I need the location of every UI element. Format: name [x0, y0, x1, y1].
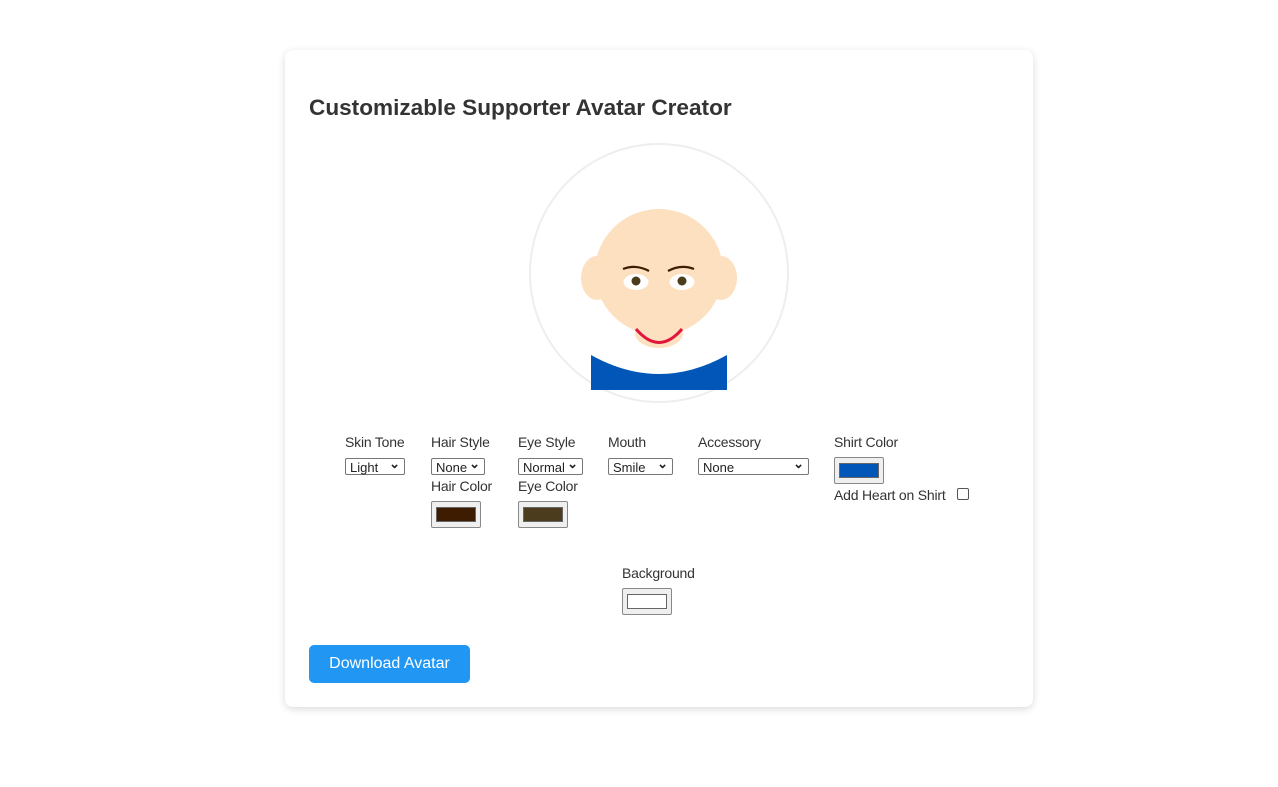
- title: Customizable Supporter Avatar Creator: [309, 95, 732, 120]
- control: shirt color and heart: [834, 434, 969, 503]
- control: mouth: [608, 434, 673, 475]
- control: eye style and color: Eye Color: [518, 478, 578, 494]
- control: accessory: None: [703, 460, 734, 475]
- control: skin tone: [345, 434, 405, 475]
- control: background: Background: [622, 565, 695, 581]
- control: eye style and color: Normal: [523, 460, 565, 475]
- panel: card: [285, 50, 1033, 707]
- control: hair style and color: None: [436, 460, 467, 475]
- control: mouth: Smile: [613, 460, 646, 475]
- control: skin tone: Skin Tone: [345, 434, 404, 450]
- control: shirt color and heart: Shirt Color: [834, 434, 898, 450]
- control: accessory: Accessory: [698, 434, 761, 450]
- control: mouth: Mouth: [608, 434, 646, 450]
- control: background: [622, 565, 695, 615]
- control: shirt color and heart: Add Heart on Shirt: [834, 487, 946, 503]
- button: download: [309, 645, 470, 683]
- control: hair style and color: [431, 434, 492, 528]
- control: hair style and color: Hair Style: [431, 434, 490, 450]
- control: accessory: [698, 434, 809, 475]
- button: download: Download Avatar: [329, 655, 450, 672]
- control: skin tone: Light: [350, 460, 378, 475]
- control: hair style and color: Hair Color: [431, 478, 492, 494]
- control: eye style and color: Eye Style: [518, 434, 575, 450]
- control: eye style and color: [518, 434, 583, 528]
- avatar preview: [529, 143, 789, 403]
